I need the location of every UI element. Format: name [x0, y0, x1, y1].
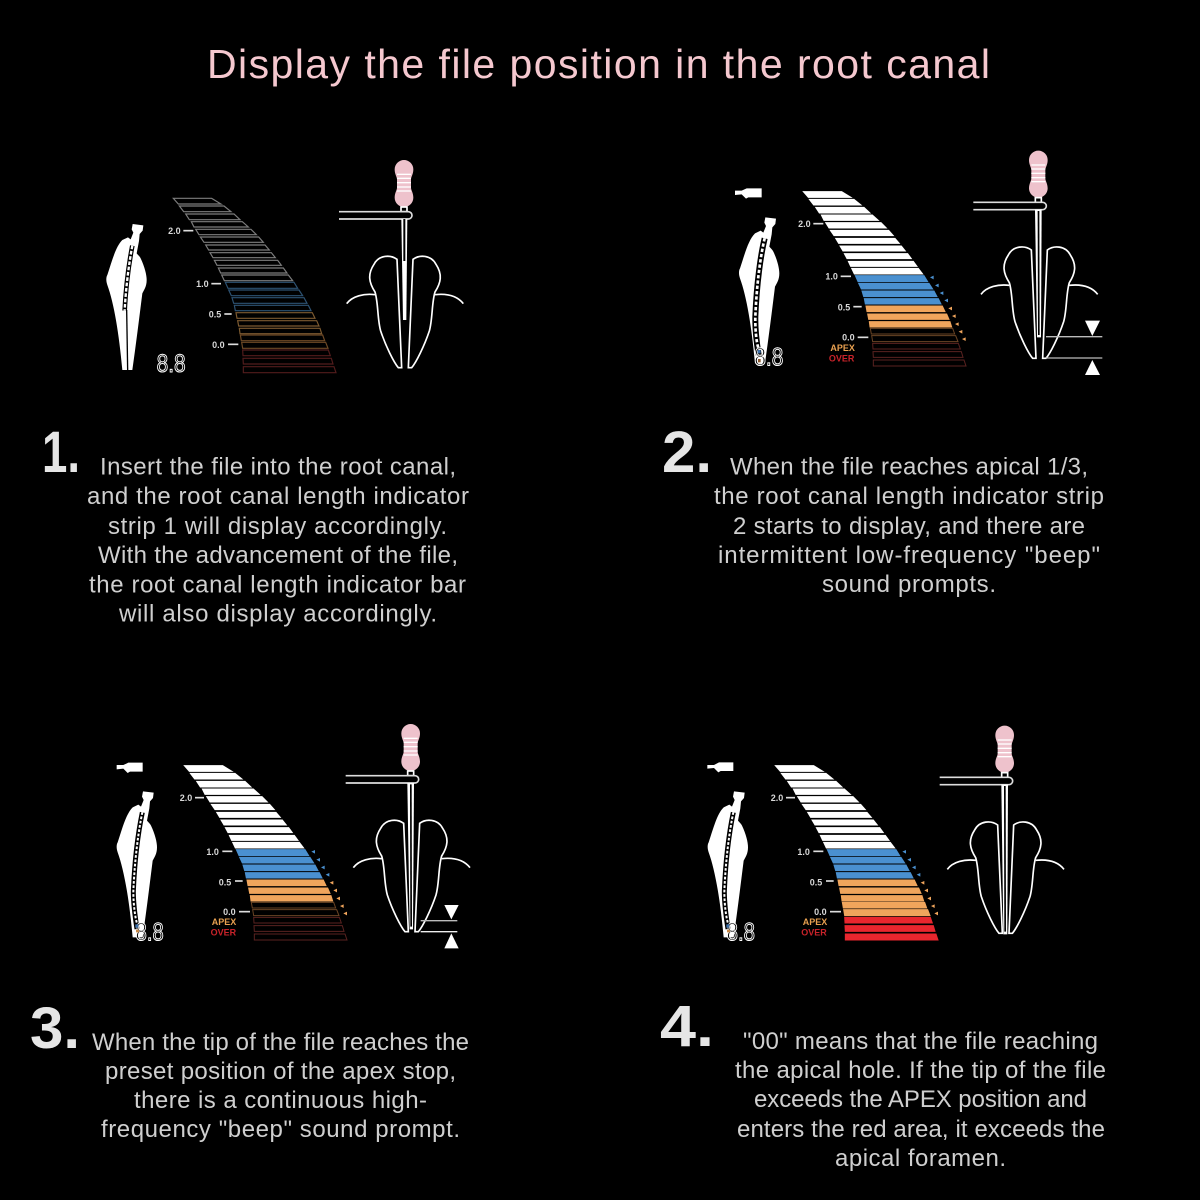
- step 4 text: apical foramen.: [835, 1145, 1006, 1172]
- step 2 text: [714, 454, 1104, 598]
- scale labels: OVER: [211, 927, 237, 937]
- scale labels: 2.0: [798, 219, 811, 229]
- step 2 number: 2.: [662, 420, 712, 485]
- digital display: 8.8: [136, 918, 164, 946]
- scale labels: OVER: [801, 927, 827, 937]
- digital display: 8.8: [727, 918, 755, 946]
- tip indicator: [758, 350, 761, 362]
- icon: file in root canal: [346, 724, 470, 932]
- scale labels: [168, 226, 238, 350]
- step 4 text: the apical hole. If the tip of the file: [735, 1057, 1106, 1084]
- scale labels: 2.0: [771, 793, 783, 803]
- icon: hand pointer: [117, 763, 143, 773]
- step 1 text: strip 1 will display accordingly.: [108, 513, 447, 540]
- indicator strip: [184, 766, 347, 940]
- tip indicator: [726, 924, 730, 932]
- scale labels: 0.0: [842, 333, 855, 343]
- icon: tooth silhouette: [739, 217, 779, 363]
- scale labels: [180, 793, 250, 937]
- icon: tooth silhouette: [708, 791, 748, 937]
- position markers: [930, 276, 966, 341]
- step 1 text: Insert the file into the root canal,: [100, 454, 456, 480]
- scale labels: 0.5: [838, 302, 850, 312]
- scale labels: 2.0: [180, 793, 192, 803]
- digital display: 8.8: [157, 350, 186, 378]
- scale labels: 1.0: [797, 847, 810, 857]
- indicator strip: [803, 192, 966, 366]
- panel 3: apex stop reached: [117, 724, 470, 948]
- step 2 text: When the file reaches apical 1/3,: [730, 454, 1088, 480]
- scale labels: 1.0: [206, 847, 219, 857]
- scale labels: APEX: [830, 343, 855, 353]
- step 1 text: [87, 454, 469, 628]
- scale labels: 0.0: [212, 340, 225, 350]
- step 1 text: the root canal length indicator bar: [89, 572, 466, 598]
- tip indicator: [135, 924, 139, 932]
- step 3 text: there is a continuous high-: [134, 1087, 427, 1114]
- panel 4: apical foramen reached: [707, 726, 1064, 946]
- panel 1: initial file insertion: [106, 160, 463, 378]
- scale labels: 0.5: [209, 310, 221, 320]
- position markers: [311, 850, 347, 915]
- step 2 text: intermittent low-frequency "beep": [718, 542, 1100, 569]
- indicator strip: unlit: [173, 198, 336, 373]
- step 1 text: and the root canal length indicator: [87, 483, 469, 510]
- position markers: [902, 850, 938, 915]
- step 4 number: 4.: [660, 994, 714, 1059]
- scale labels: 1.0: [825, 272, 838, 282]
- step 3 text: [92, 1029, 469, 1143]
- step 1 text: With the advancement of the file,: [98, 542, 458, 569]
- digital display: 8.8: [754, 343, 783, 371]
- scale labels: [771, 793, 841, 937]
- step 4 text: enters the red area, it exceeds the: [737, 1116, 1105, 1143]
- step 2 text: 2 starts to display, and there are: [733, 513, 1085, 540]
- step 4 text: [735, 1028, 1106, 1172]
- step 1 number: 1.: [42, 420, 80, 485]
- icon: file in root canal: [973, 151, 1098, 358]
- step 2 text: sound prompts.: [822, 571, 996, 598]
- icon: file in root canal: [940, 726, 1064, 934]
- scale labels: 2.0: [168, 226, 181, 236]
- icon: tooth silhouette: [106, 224, 147, 371]
- panel 2: apical third reached: [735, 151, 1102, 375]
- icon: file in root canal: [339, 160, 463, 368]
- step 3 text: frequency "beep" sound prompt.: [101, 1116, 460, 1143]
- scale labels: 1.0: [196, 279, 209, 289]
- step 3 number: 3.: [30, 996, 80, 1061]
- step 4 text: "00" means that the file reaching: [743, 1028, 1098, 1055]
- step 3 text: When the tip of the file reaches the: [92, 1029, 469, 1056]
- scale labels: OVER: [829, 353, 855, 363]
- step 4 text: exceeds the APEX position and: [754, 1086, 1087, 1113]
- scale labels: 0.0: [814, 907, 827, 917]
- icon: hand pointer: [707, 762, 733, 772]
- measurement arrows: [1046, 321, 1102, 375]
- icon: tooth silhouette: [117, 791, 157, 937]
- scale labels: APEX: [803, 917, 827, 927]
- indicator strip: [775, 766, 938, 940]
- scale labels: [798, 219, 868, 363]
- measurement arrows: [421, 905, 459, 948]
- scale labels: 0.5: [810, 877, 822, 887]
- step 1 text: will also display accordingly.: [118, 600, 437, 628]
- scale labels: APEX: [212, 917, 236, 927]
- scale labels: 0.0: [223, 907, 236, 917]
- scale labels: 0.5: [219, 877, 231, 887]
- step 3 text: preset position of the apex stop,: [105, 1058, 456, 1085]
- step 2 text: the root canal length indicator strip: [714, 483, 1104, 510]
- title: Display the file position in the root canal: [207, 41, 990, 87]
- icon: hand pointer: [735, 188, 762, 199]
